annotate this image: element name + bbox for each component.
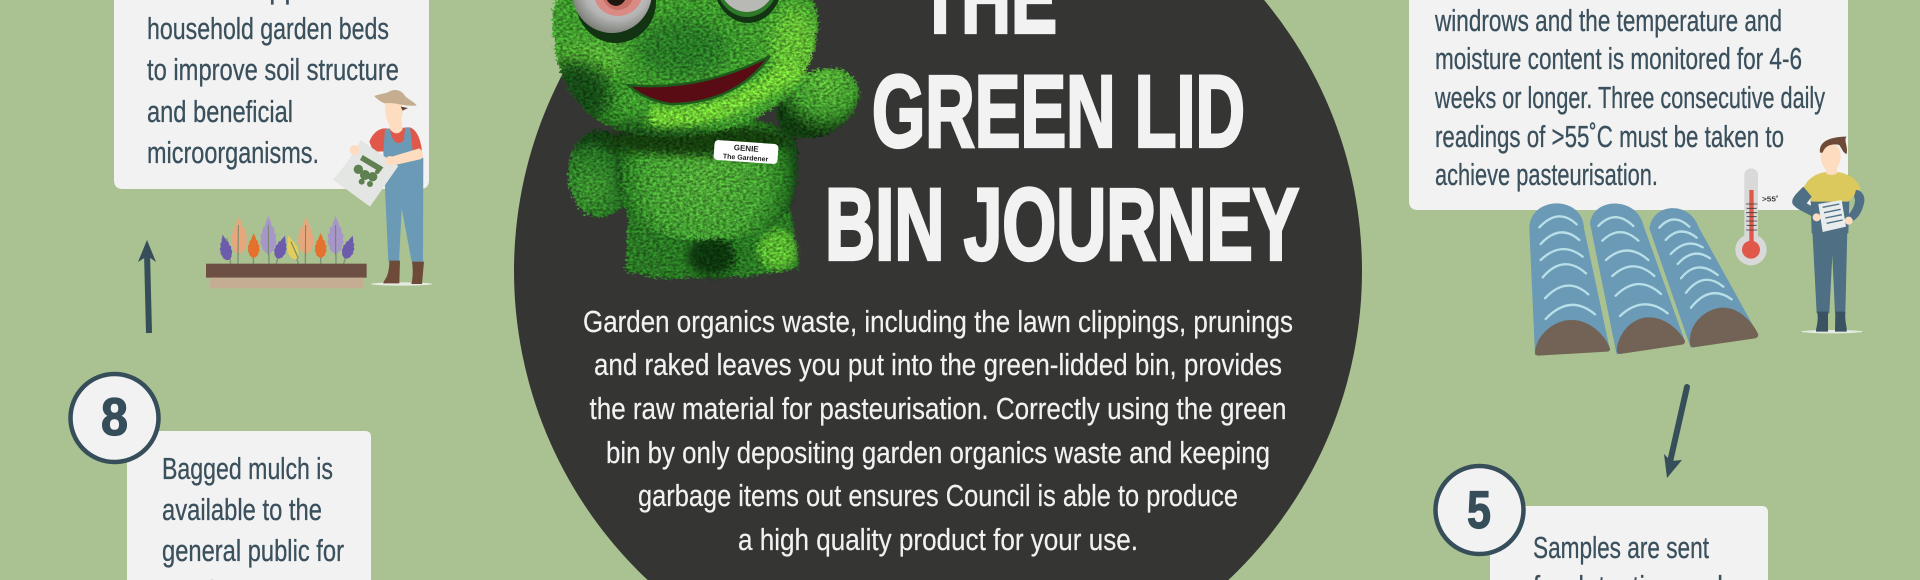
name tag: GENIE (734, 143, 760, 154)
step 4 text: readings of >55˚C must be taken to (1435, 119, 1784, 154)
central description text: garbage items out ensures Council is able to produce (638, 478, 1238, 513)
step 4 text: achieve pasteurisation. (1435, 157, 1658, 192)
title: GREEN LID (872, 54, 1245, 168)
central description text: the raw material for pasteurisation. Correctly using the green (590, 391, 1286, 426)
step 5 number badge (1436, 466, 1524, 554)
name tag: The Gardener (723, 153, 769, 164)
step 8 number badge (70, 374, 158, 462)
step 5 text: Samples are sent (1533, 530, 1709, 565)
step 4 text: windrows and the temperature and (1434, 3, 1782, 38)
step 8 text: general public for (162, 533, 344, 568)
right eye (713, 0, 783, 23)
central description text (583, 304, 1293, 557)
card background (1490, 506, 1768, 580)
title: BIN JOURNEY (825, 168, 1299, 282)
central description text: a high quality product for your use. (738, 522, 1138, 557)
step 9 text: microorganisms. (147, 135, 319, 170)
mascot: fuzzy green frog (532, 0, 872, 279)
left eye (572, 0, 656, 43)
icon: three compost windrows (1529, 203, 1758, 356)
title (825, 0, 1299, 282)
central description text: and raked leaves you put into the green-lidded bin, provides (594, 347, 1282, 382)
step 5 number badge: 5 (1467, 481, 1491, 540)
mouth (628, 56, 770, 104)
step 9 text: household garden beds (147, 11, 389, 46)
panel: step 4 windrows monitoring (1409, 0, 1848, 210)
panel: step 9 applied to garden beds (114, 0, 429, 189)
fur body (532, 0, 872, 279)
card background (1409, 0, 1848, 210)
step 8 text (162, 451, 344, 580)
central description text: bin by only depositing garden organics waste and keeping (606, 435, 1270, 470)
arrow: step 4 to step 5 (1664, 387, 1687, 478)
step 5 text (1533, 530, 1723, 580)
step 8 number badge: 8 (101, 388, 128, 447)
step 8 text: Bagged mulch is (162, 451, 333, 486)
icon: garden bed with plants (206, 216, 367, 288)
panel: step 5 samples (1436, 466, 1768, 580)
icon: person with clipboard (1792, 137, 1864, 333)
name tag (713, 140, 779, 164)
icon: thermometer: >55˚ (1762, 194, 1779, 203)
central dark circle (514, 0, 1362, 580)
card background (114, 0, 429, 189)
icon: thermometer (1735, 168, 1779, 265)
step 9 text: to improve soil structure (147, 52, 399, 87)
panel: step 8 bagged mulch (70, 374, 371, 580)
step 4 text (1434, 3, 1825, 192)
step 8 text: available to the (162, 492, 322, 527)
icon: farmer pouring bag of mulch (333, 90, 432, 286)
arrow: step 8 to step 9 (138, 240, 156, 333)
step 9 text (147, 0, 399, 170)
card background (127, 431, 371, 580)
step 9 text: and beneficial (147, 94, 293, 129)
central description text: Garden organics waste, including the lawn clippings, prunings (583, 304, 1293, 339)
